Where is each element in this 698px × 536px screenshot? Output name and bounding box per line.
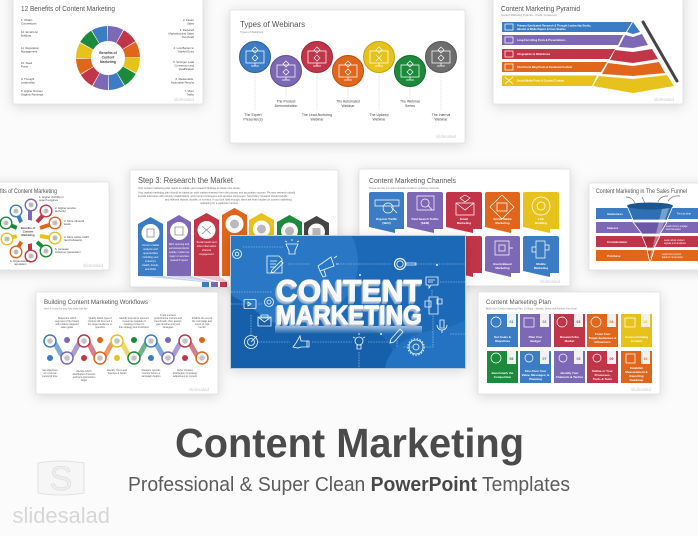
tile: mobile [523, 236, 559, 277]
footer mark: slidesalad [189, 387, 209, 392]
funnel [627, 202, 673, 263]
workflow text top: Identify internal or account [119, 317, 149, 320]
wheel labels: 3. More inbound [64, 219, 85, 223]
pyramid row icons [505, 24, 513, 84]
webinar icon: orange [332, 56, 364, 86]
tile: link building [523, 192, 559, 233]
wheel labels: authority [55, 209, 66, 213]
funnel row descriptions: and interested [666, 228, 681, 231]
webinar labels: Webinar [311, 118, 324, 122]
icon: hand with pen [293, 336, 309, 348]
plan tile 07: Value, Messages, & [522, 373, 550, 377]
workflow text top: Finalize the end of [192, 317, 213, 320]
plan tile 09: Define or Your [592, 369, 614, 373]
right benefit labels: 2. Faster [183, 18, 194, 22]
right benefit labels: Actionable Results [171, 80, 195, 84]
plan tile 07: 07 [543, 357, 546, 361]
plan tile 08: 08 [577, 357, 580, 361]
workflow text bottom: and best promotions [73, 376, 96, 379]
right benefit labels: Overhead [182, 35, 194, 39]
workflows subtitle: Here is a step-by-step flow chart look like [44, 308, 88, 310]
workflow text top: will produce targeted [55, 323, 79, 326]
funnel row labels: Purchase [607, 254, 621, 258]
badge: red: channel [202, 248, 211, 252]
plan tile 10: 10 [644, 357, 647, 361]
webinar labels: The Expert [244, 113, 262, 117]
workflow text top: benchmark, then assess [154, 320, 182, 323]
plan tile 04: Influencers [594, 340, 611, 344]
heading: channels: Content Marketing Channels [369, 176, 456, 185]
tile: paid search: Paid Search Traffic [411, 217, 439, 221]
funnel rows [596, 208, 698, 261]
footer mark: slidesalad [654, 97, 674, 102]
workflow text top: performance metrics and [154, 317, 182, 320]
right benefit labels: 7. More [185, 89, 194, 93]
icon: target [244, 336, 258, 348]
donut centre label: Marketing [100, 60, 116, 64]
channels subtitle: These are the 14 most important content marketing channels [369, 186, 440, 190]
tile: event marketing: Marketing [495, 266, 510, 270]
pyramid row labels: Primary Syndicated Research & Thought Leadership Books, [517, 24, 592, 28]
plan tile 10: Reporting [629, 374, 644, 378]
tile: link building: Building [535, 221, 547, 225]
hero title: CONTENT [276, 273, 422, 308]
left benefit labels: Building [21, 34, 31, 38]
hero title [274, 279, 422, 328]
webinar labels: Series [405, 104, 415, 108]
plan tile 02: Plan Your [529, 335, 543, 339]
workflow text top: specifics [95, 326, 106, 329]
right benefit labels: Market Entry [178, 50, 195, 54]
badge base fans [138, 276, 228, 282]
left benefit labels: Management [21, 50, 38, 54]
tile: email: Email [460, 217, 468, 221]
icon: microphone [437, 320, 447, 333]
heading: workflows: Building Content Marketing Workflows [44, 299, 149, 306]
right benefit labels: 5. Stronger Lead [173, 60, 194, 64]
left benefit labels: Conversions [21, 22, 37, 26]
heading: step 3: Step 3: Research the Market [138, 176, 234, 185]
icon: gear small [264, 298, 274, 306]
webinar labels: The Internal [432, 113, 451, 117]
left benefit labels: Organic Rankings [21, 92, 44, 96]
panel: content plan slide [478, 292, 660, 394]
workflow text top: strategies [163, 326, 174, 329]
left benefit labels: Posts [21, 64, 29, 68]
wave connector [50, 341, 202, 358]
tile: social media: Social Media [493, 217, 512, 221]
wheel labels: customer generation [55, 250, 81, 254]
left benefit labels: 12. Email List [21, 30, 38, 34]
hero dashed connectors [231, 247, 465, 368]
webinar icon: purple [270, 56, 302, 86]
right benefit labels: Sales [187, 22, 195, 26]
workflow text top: sales goals [61, 326, 74, 329]
connector lines [255, 72, 441, 110]
plan tile 06 [487, 351, 518, 383]
panel: types of webinars slide [230, 10, 465, 143]
footer mark: slidesalad [174, 97, 194, 102]
badge: dark [304, 216, 329, 250]
hero background blobs [231, 236, 465, 368]
right benefit labels: 3. Reduced [180, 28, 194, 32]
workflow text bottom: Decide which [77, 370, 92, 373]
badge: blue: industry's [145, 259, 157, 263]
webinar labels: The Webinar [400, 100, 421, 104]
workflow text bottom: campaign begins [142, 375, 161, 378]
workflow text bottom: target [81, 379, 87, 382]
heading: benefits: fits of Content Marketing [0, 188, 57, 195]
badge: red: other information [197, 244, 217, 248]
right benefit labels: 4. Low Barrier to [173, 46, 194, 50]
webinar labels: Demonstration [275, 104, 297, 108]
logo mark: S [50, 460, 72, 498]
plan tile 09: Tools & Team [593, 377, 612, 381]
heading: 12 benefits: 12 Benefits of Content Marketing [21, 4, 115, 13]
footer mark: slidesalad [83, 263, 103, 268]
tile: social media [485, 192, 520, 233]
plan tile 10: Roadmap [630, 378, 644, 382]
donut centre label: Content [102, 56, 115, 60]
badge: purple: major or services [169, 254, 190, 258]
plan subtitle: Build Your Content Marketing Plan, 10 Steps – Identify, Define and Achieve Your Goal [486, 308, 577, 310]
plan tile 08: Channels & Tactics [556, 375, 584, 379]
webinar labels: The Automated [336, 100, 360, 104]
workflow nodes [44, 335, 208, 364]
plan tile 05: Assess Existing [625, 335, 648, 339]
icon: gear large [408, 339, 424, 355]
tile: organic traffic: (SEO) [382, 221, 391, 225]
tile: email [446, 192, 482, 233]
left benefit labels: 8. Higher Domain [21, 89, 43, 93]
webinars subtitle: Types of Webinars [240, 30, 264, 34]
panel: benefits wheel slide [0, 182, 109, 270]
icon: pencil [390, 329, 403, 343]
wheel labels: search engines [39, 198, 59, 202]
plan tile 01: Objectives [495, 339, 510, 343]
wheel node icons [4, 202, 58, 258]
funnel row labels: Awareness [607, 212, 623, 216]
funnel row descriptions: leads to conversions [662, 256, 684, 259]
pyramid row labels: Social Media Posts & Curated Content [517, 78, 564, 82]
workflow text bottom: Measure specific [142, 369, 161, 372]
panel: 12 benefits slide [13, 0, 203, 104]
icon: document and pen [267, 256, 283, 273]
badge: orange [222, 208, 247, 276]
hero title reflection [275, 326, 422, 334]
webinar icon: grey [426, 42, 456, 72]
webinar labels: Webinar [435, 118, 448, 122]
plan tile 05: 05 [644, 320, 647, 324]
plan tile 05 [621, 314, 652, 347]
wheel labels: 6. Organization's [10, 259, 32, 263]
workflow node icons [47, 338, 205, 361]
workflow text bottom: metrics before a [142, 372, 161, 375]
plan tile 05: Content [631, 339, 642, 343]
wheel labels: 2. Higher service [55, 206, 76, 210]
badge: red: Social needs and [197, 240, 217, 244]
tile: mobile: Marketing [534, 266, 548, 270]
heading: types of webinars: Types of Webinars [240, 20, 305, 29]
tile: paid search [407, 192, 443, 233]
badge: blue: analysis and [143, 247, 158, 251]
workflow text top: trends [199, 326, 206, 329]
workflow text top: the campaign and [192, 320, 213, 323]
webinar icon: green [394, 56, 426, 86]
funnel arrows [626, 196, 680, 203]
tile: social media: Marketing [495, 221, 510, 225]
wheel labels: 1. Higher visibility in [39, 195, 64, 199]
funnel row descriptions: Learn about content [664, 239, 685, 242]
tile: link building: Link [538, 217, 544, 221]
pyramid layers [593, 22, 674, 93]
plan tile 07 [520, 351, 551, 383]
plan tile 09 [587, 351, 618, 383]
wheel labels: 4. More active traffic [64, 235, 90, 239]
webinar icon: yellow [364, 42, 394, 72]
wheel labels: reputation [14, 262, 27, 266]
workflow text top: Track success [160, 314, 177, 317]
left benefit labels: 9. Thought [21, 77, 35, 81]
workflow text bottom: period of time [42, 375, 58, 378]
plan tile 04 [587, 314, 618, 347]
badge: red [194, 213, 219, 276]
pyramid row labels: Short-Form Blog Posts & Curational Content [517, 65, 572, 69]
intro paragraph: any relevant reports, studies, or surveys. If you look hard enough, there are even studies on content marketing [165, 198, 292, 202]
funnel row descriptions: Learn how content [662, 253, 681, 256]
left benefit labels: 1. Obtain [21, 18, 33, 22]
workflow text top: segment of the board [55, 320, 79, 323]
pyramid row labels: Infographics & Slideshows [517, 52, 551, 56]
wheel nodes [0, 199, 61, 262]
pyramid row labels: Long-Form Blog Posts & Presentations [517, 38, 566, 42]
plan tile 03: Research the [560, 335, 579, 339]
logo mark [38, 460, 84, 498]
plan tile 08: Identify Your [560, 371, 579, 375]
funnel row descriptions: signals and decisions [664, 243, 687, 245]
badge: green [277, 215, 302, 250]
workflow text bottom: for a formal [44, 372, 57, 375]
footer mark: slidesalad [540, 279, 560, 284]
badge: blue: Current market [142, 243, 159, 247]
heading: funnel: Content Marketing in The Sales Funnel [596, 189, 687, 195]
workflow text top: line strategy and timeframe [119, 326, 150, 329]
right benefit labels: Qualification [179, 67, 194, 71]
tile: event marketing: Event-Based [493, 262, 512, 266]
panel: hero cover [226, 232, 470, 376]
workflow text bottom: Identify Your Lead [107, 369, 128, 372]
icon: envelope [258, 315, 271, 326]
plan tile 07: Fine-Tune Your [525, 369, 547, 373]
plan tile 01: 01 [510, 320, 513, 324]
badge: blue [138, 217, 163, 276]
workflow text bottom: distribution of strategy [173, 372, 198, 375]
workflow text bottom: distribution channels [73, 373, 96, 376]
hero title: MARKETING [276, 300, 422, 330]
icon: sparkles [359, 264, 438, 335]
pyramid row bars [502, 22, 632, 86]
icon: magnifier [394, 258, 416, 270]
intro paragraph: include interviews with industry stakeholders, and prompt employees and services consumers. Secondary research should include [138, 194, 288, 198]
badge: purple [167, 215, 191, 276]
badge: red: engagement [199, 252, 214, 256]
heading: plan: Content Marketing Plan [486, 299, 551, 306]
plan tile 09: Processes, [595, 373, 611, 377]
donut centre label: Benefits of [99, 51, 118, 55]
plan tile 03: Market [565, 339, 574, 343]
plan tile 10: Measurement & [625, 370, 649, 374]
plan tile 06: 06 [510, 357, 513, 361]
plan tile 04: 04 [610, 320, 613, 324]
tile: event marketing [485, 236, 520, 277]
badge: blue: and shifts [145, 267, 157, 271]
plan tile 02: 02 [543, 320, 546, 324]
intro paragraph: Your content marketing plan needs to include your research findings on these core areas. [138, 186, 241, 190]
workflow text top: Qualify which type of [88, 317, 112, 320]
wheel centre [16, 220, 40, 244]
funnel row labels: Interest [607, 226, 618, 230]
workflow text top: creating content in [124, 323, 145, 326]
intro paragraph: marketing for a particular venture. [200, 201, 239, 205]
webinar labels: The Upkeep [369, 113, 389, 117]
workflow text bottom: adjustment to content [173, 375, 197, 378]
logo wordmark: slidesalad [12, 503, 110, 528]
panel: sales funnel slide [589, 183, 698, 270]
plan tile 10 [621, 351, 652, 383]
workflow text top: the target audience in [88, 323, 113, 326]
workflow text bottom: Sources & Goals [108, 372, 127, 375]
wheel centre: Content [23, 230, 33, 234]
plan tile 06: Competition [494, 375, 511, 379]
funnel row descriptions: Find out what [677, 212, 691, 216]
tile: organic traffic [369, 192, 404, 233]
webinar labels: The Product [276, 100, 296, 104]
pyramid row labels: eBooks & White Papers & Case Studies [517, 27, 566, 31]
workflow text top: report of cost [195, 323, 210, 326]
webinar icon: red [302, 42, 332, 72]
panel: pyramid slide [493, 0, 683, 104]
wheel centre: Marketing [21, 233, 35, 237]
badge: blue: opportunities [143, 251, 159, 255]
subtitle: Professional & Super Clean PowerPoint Templates [128, 474, 570, 496]
workflow text top: Determine which [58, 317, 77, 320]
icon: gear left [232, 250, 242, 258]
workflow text bottom: Set objectives [42, 369, 59, 372]
icon: chat bubble [426, 277, 438, 288]
right benefit labels: Marketing and Sales [168, 32, 195, 36]
funnel row descriptions: Learn how to engage [666, 225, 688, 228]
plan tile 01 [487, 314, 518, 347]
plan tile 04: Target Audiences & [589, 336, 617, 340]
wheel labels: (and followers) [64, 238, 82, 242]
plan tile 04: Know Your [595, 332, 611, 336]
plan tile 09: 09 [610, 357, 613, 361]
plan tile 03: 03 [577, 320, 580, 324]
webinar labels: Webinar [373, 118, 386, 122]
badge: blue: health, trends, [142, 263, 159, 267]
left benefit labels: 11. Reputation [21, 46, 39, 50]
icon: video player [244, 300, 256, 308]
badge: purple: services/products [169, 246, 190, 250]
webinar labels: Presenter(s) [243, 118, 263, 122]
pyramid side bar [643, 22, 677, 81]
pyramid subtitle: Content Marketing Pyramid – Credit: Curata.com [501, 13, 557, 17]
right benefit labels: 6. Measurable, [175, 77, 194, 81]
icon: devices [425, 297, 442, 314]
badge: purple: quality, market as [169, 250, 190, 254]
tile: sponsorship [446, 236, 482, 277]
webinar labels: The Lead-Nurturing [302, 113, 332, 117]
workflow text top: your timeline and your [156, 323, 180, 326]
plan tile 03 [554, 314, 585, 347]
tile: paid search: (SEM) [421, 221, 429, 225]
workflow dots [47, 337, 205, 361]
plan tile 02: Budget [530, 339, 541, 343]
badge: purple: SEO opening and [169, 242, 190, 246]
intro paragraph: Your market marketing plan should be based on solid market research from the primary and secondary sources. Primary research should [138, 190, 296, 194]
tile: organic traffic: Organic Traffic [376, 217, 397, 221]
wheel labels: leads [64, 222, 71, 226]
badge: purple: research report [170, 258, 188, 262]
badge: yellow [249, 213, 274, 250]
icon: bulb bottom [353, 333, 365, 349]
left benefit labels: Leadership [21, 80, 35, 84]
colour swatches [202, 282, 227, 287]
workflow text top: content will best suit a [88, 320, 113, 323]
workflow text top: resources capable of [122, 320, 146, 323]
plan tile 10: Establish [630, 366, 643, 370]
tile: mobile: Mobile [536, 262, 546, 266]
heading: pyramid: Content Marketing Pyramid [501, 4, 580, 13]
plan tile 07: Planning [529, 377, 542, 381]
right benefit labels: Traffic [186, 92, 195, 96]
plan tile 02 [520, 314, 551, 347]
panel: workflows slide [36, 292, 218, 394]
plan tile 06: Benchmark the [492, 371, 514, 375]
donut chart [74, 24, 142, 92]
panel: research the market slide [130, 170, 338, 287]
plan tile 08 [554, 351, 585, 383]
workflow text bottom: Refer Content [177, 369, 193, 372]
wheel spokes [10, 210, 52, 252]
footer mark: slidesalad [631, 387, 651, 392]
left benefit labels: 10. Seed [21, 61, 33, 65]
tile: email: Marketing [457, 221, 471, 225]
icon: bulb top [285, 239, 299, 254]
footer mark: slidesalad [436, 134, 456, 139]
funnel row labels: Consideration [607, 240, 627, 244]
main title: Content Marketing [175, 420, 524, 466]
wheel centre: Benefits of [21, 226, 35, 230]
webinar labels: Webinar [342, 104, 355, 108]
right benefit labels: Conversion and [174, 64, 194, 68]
wheel labels: 5. Increase [55, 247, 69, 251]
webinar icon: blue [240, 42, 270, 72]
badge: blue: including your [142, 255, 159, 259]
plan tile 01: Set Goals & [494, 335, 512, 339]
panel: channels slide [359, 169, 570, 286]
icon: megaphone [318, 256, 339, 277]
